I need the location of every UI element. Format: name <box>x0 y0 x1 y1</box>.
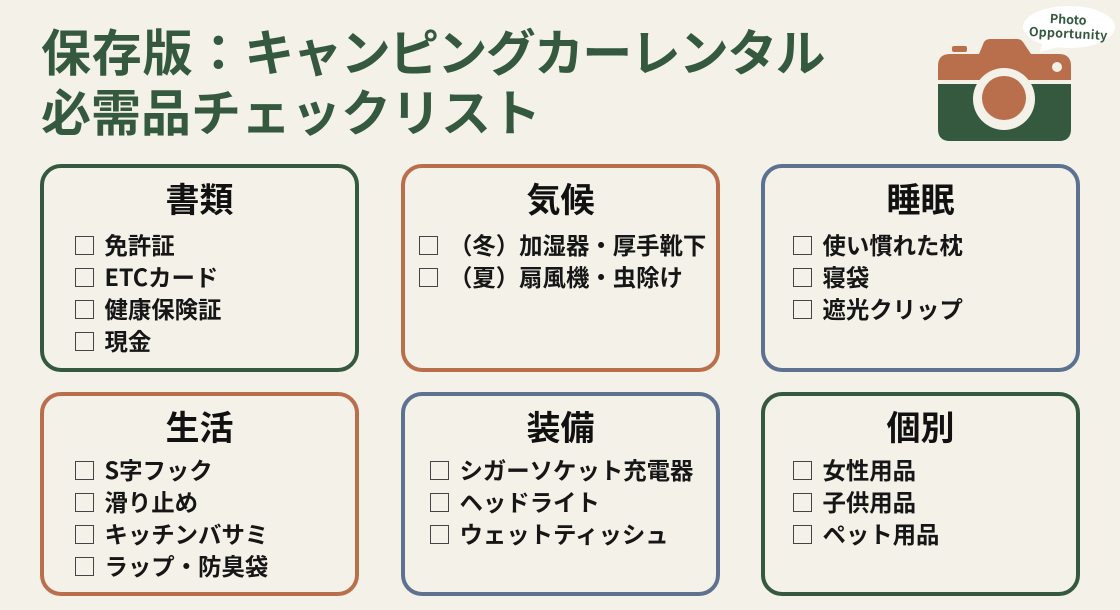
lens ring <box>973 68 1035 130</box>
panel: 個別: ペット用品 <box>822 516 939 550</box>
panel: 個別: 子供用品 <box>822 484 916 518</box>
item <box>430 516 669 550</box>
camera body bottom <box>938 84 1071 141</box>
panel: 睡眠: 使い慣れた枕 <box>822 227 963 261</box>
panel: 装備: ヘッドライト <box>460 484 600 518</box>
item <box>793 516 939 550</box>
heading: 個別 <box>886 401 954 450</box>
panel: 書類: 健康保険証 <box>104 291 221 325</box>
panel: 書類: ETCカード <box>104 259 218 293</box>
panel: 生活: ラップ・防臭袋 <box>104 548 268 582</box>
item <box>793 291 963 325</box>
panel: 装備: ウェットティッシュ <box>460 516 669 550</box>
panel: 書類: 免許証 <box>104 227 175 261</box>
item <box>430 484 600 518</box>
panel: 個別 <box>761 392 1080 596</box>
item <box>430 452 694 486</box>
title <box>41 14 824 146</box>
panel: 書類: 現金 <box>104 323 151 357</box>
heading: 装備 <box>526 401 594 450</box>
item <box>75 516 268 550</box>
camera shutter button <box>952 46 967 52</box>
bubble text: Opportunity <box>1029 21 1108 44</box>
panel: 気候: （冬）加湿器・厚手靴下 <box>449 227 706 261</box>
flash <box>1052 62 1062 72</box>
heading: 書類 <box>166 173 234 222</box>
title line 2: 必需品チェックリスト <box>41 74 541 146</box>
item <box>793 259 869 293</box>
panel: 生活: S字フック <box>104 452 213 486</box>
icon: camera with speech bubble <box>938 6 1115 141</box>
title line 1: 保存版：キャンピングカーレンタル <box>41 14 824 86</box>
panel: 個別: 女性用品 <box>822 452 916 486</box>
camera body top <box>938 39 1071 80</box>
lens <box>982 76 1026 120</box>
bubble text <box>1029 8 1108 44</box>
panel: 気候: （夏）扇風機・虫除け <box>449 259 683 293</box>
item <box>75 227 175 261</box>
panel: 睡眠: 寝袋 <box>822 259 869 293</box>
heading: 睡眠 <box>886 173 954 222</box>
panel: 装備: シガーソケット充電器 <box>460 452 693 486</box>
panel: 気候 <box>401 164 720 372</box>
item <box>419 259 683 293</box>
panel: 装備 <box>401 392 720 596</box>
item <box>419 227 706 261</box>
item <box>75 259 218 293</box>
item <box>75 323 151 357</box>
panel: 生活: キッチンバサミ <box>104 516 268 550</box>
panel: 生活: 滑り止め <box>104 484 198 518</box>
item <box>793 484 916 518</box>
heading: 生活 <box>166 401 234 450</box>
item <box>75 548 268 582</box>
bubble text: Photo <box>1049 8 1087 29</box>
item <box>793 452 916 486</box>
panel: 睡眠: 遮光クリップ <box>822 291 963 325</box>
speech bubble <box>1023 6 1115 52</box>
panel: 生活 <box>40 392 359 596</box>
heading: 気候 <box>526 173 594 222</box>
panel: 睡眠 <box>761 164 1080 372</box>
item <box>75 484 198 518</box>
item <box>75 452 213 486</box>
item <box>75 291 221 325</box>
panel: 書類 <box>40 164 359 372</box>
item <box>793 227 963 261</box>
